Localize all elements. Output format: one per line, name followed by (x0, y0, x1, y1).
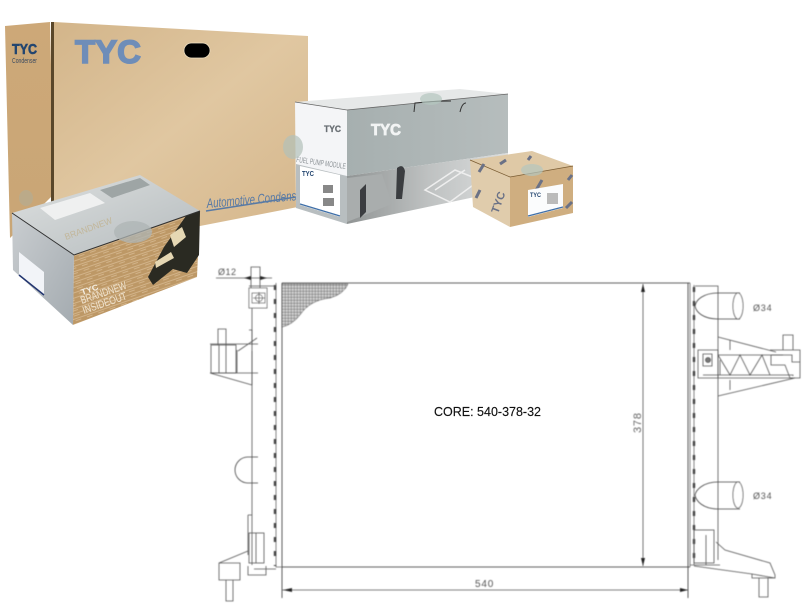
box front logo: TYC (371, 122, 401, 139)
kraft tape logos: TYC (490, 190, 508, 215)
carton side panel (5, 22, 54, 238)
dimension Ø12: Ø12 (218, 267, 237, 277)
dimension 378 (632, 284, 645, 566)
front logo: TYC (75, 34, 141, 70)
carton left face (12, 213, 74, 325)
carton front face (73, 211, 200, 325)
side label: Condenser (12, 56, 37, 65)
left bracket (210, 329, 258, 385)
label logo: TYC (302, 169, 314, 178)
box top (295, 89, 508, 110)
box photo band (347, 153, 508, 224)
upper-left mount stud (249, 267, 267, 308)
diameter label lower: Ø34 (753, 491, 772, 501)
upper-right pipe (695, 293, 743, 319)
box top handle (414, 101, 466, 112)
kraft right face (510, 166, 573, 227)
kraft top (470, 151, 573, 177)
technical drawing of condenser (210, 267, 800, 601)
carton front panel (54, 22, 308, 226)
box side title: FUEL PUMP MODULE (296, 155, 346, 171)
brand new carton: INSIDEOUT (81, 290, 129, 317)
box left logo: TYC (324, 124, 341, 134)
carton front logo: TYC (80, 282, 100, 297)
hologram on carton (114, 221, 152, 243)
dimension 378: 378 (632, 412, 644, 433)
box left face (295, 102, 347, 224)
small kraft box (470, 151, 573, 227)
left face label (19, 252, 44, 295)
kraft label logo: TYC (530, 192, 541, 199)
core fin hatching (282, 284, 348, 327)
carton edge (12, 211, 200, 255)
product image on carton (148, 211, 200, 285)
hologram stickers (19, 93, 543, 206)
kraft white label (528, 184, 563, 217)
right tank (690, 283, 720, 567)
side logo: TYC (12, 41, 37, 58)
dimension 540 (282, 579, 688, 592)
carton top text: BRANDNEW (63, 215, 114, 242)
grey fuel pump box (295, 89, 508, 224)
core rectangle (282, 283, 690, 598)
core specification: CORE: 540-378-32 (434, 405, 541, 419)
diameter label upper: Ø34 (753, 303, 772, 313)
carton front text: BRANDNEW (79, 280, 129, 307)
dimension 540: 540 (475, 579, 494, 590)
kraft left face (470, 160, 510, 227)
right truss bracket (698, 335, 800, 396)
left tank (249, 283, 282, 569)
box front face (347, 94, 508, 176)
left hose outlet (235, 457, 258, 483)
dimension Ø12 (216, 267, 272, 280)
lower-right bracket (694, 530, 775, 597)
carton handle hole (184, 43, 210, 58)
lower-right pipe (695, 482, 743, 509)
large condenser carton (5, 22, 308, 238)
lower-left bracket (219, 515, 266, 601)
front slogan: Automotive Condens (205, 188, 297, 211)
brand new carton (12, 175, 200, 325)
box white label (300, 166, 340, 217)
carton top (12, 175, 200, 255)
